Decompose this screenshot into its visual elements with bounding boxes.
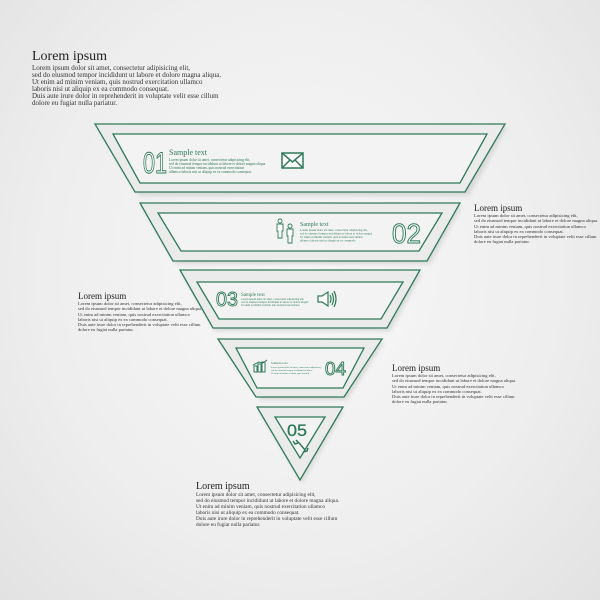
label 04: sed do eiusmod tempor incididunt ut labore	[271, 369, 313, 372]
label 03: 03	[216, 289, 238, 311]
text block: right 2: dolore eu fugiat nulla pariatur.	[392, 399, 448, 404]
label 01: sed do eiusmod tempor incididunt ut labore et dolore magna aliqua.	[169, 162, 266, 166]
label 03: Ut enim ad minim veniam, quis nostrud exercitation	[241, 304, 300, 307]
label 04	[271, 359, 346, 379]
label 04: Ut enim ad minim veniam, quis nostrud	[271, 372, 310, 375]
label 01: Ut enim ad minim veniam, quis nostrud exercitation	[169, 166, 244, 171]
text block: top left: Lorem ipsum	[32, 49, 107, 64]
label 03	[216, 289, 309, 311]
text block: left: sed do eiusmod tempor incididunt ut labore et dolore magna aliqua.	[78, 306, 202, 311]
text block: top left: Duis aute irure dolor in reprehenderit in voluptate velit esse cillum	[32, 92, 219, 100]
text block: top left: dolore eu fugiat nulla pariatur.	[32, 99, 117, 107]
text block: top left: sed do eiusmod tempor incididunt ut labore et dolore magna aliqua.	[32, 71, 221, 79]
text block: top left: Ut enim ad minim veniam, quis nostrud exercitation ullamco	[32, 78, 202, 86]
text block: right 2: Ut enim ad minim veniam, quis nostrud exercitation ullamco	[392, 384, 504, 389]
label 04: Sample text	[271, 361, 288, 365]
segment 1	[95, 124, 507, 196]
text block: bottom: dolore eu fugiat nulla pariatur.	[196, 522, 260, 528]
label 04: Lorem ipsum dolor sit amet, consectetur adipisicing	[271, 366, 322, 369]
text block: right 1: Lorem ipsum dolor sit amet, consectetur adipisicing elit,	[474, 213, 578, 218]
label 02: Ut enim ad minim veniam, quis nostrud exercitation	[300, 235, 363, 240]
text block: right 2: laboris nisi ut aliquip ex ea commodo consequat.	[392, 389, 482, 394]
label 04: 04	[325, 359, 346, 379]
icon: bar chart	[253, 360, 267, 372]
icon: wrench	[293, 440, 308, 452]
text block: bottom: Ut enim ad minim veniam, quis nostrud exercitation ullamco	[196, 504, 325, 510]
text block: bottom: sed do eiusmod tempor incididunt ut labore et dolore magna aliqua.	[196, 498, 339, 504]
text block: right 1: Lorem ipsum	[474, 203, 522, 213]
segment 4	[218, 339, 384, 400]
segment 5	[257, 407, 344, 483]
text block: bottom	[196, 481, 339, 528]
label 02: Sample text	[300, 222, 329, 228]
label 02: sed do eiusmod tempor incididunt ut labore et dolore magna	[300, 232, 373, 236]
text block: right 2: Duis aute irure dolor in reprehenderit in voluptate velit esse cillum	[392, 394, 514, 399]
text block: right 1: Ut enim ad minim veniam, quis nostrud exercitation ullamco	[474, 224, 586, 229]
text block: left: laboris nisi ut aliquip ex ea commodo consequat.	[78, 317, 168, 322]
label 03: Sample text	[241, 293, 265, 298]
label 02: 02	[392, 218, 421, 249]
text block: top left: Lorem ipsum dolor sit amet, consectetur adipisicing elit,	[32, 64, 190, 72]
label 01: 01	[143, 147, 167, 180]
label 02: Lorem ipsum dolor sit amet, consectetur adipisicing elit,	[300, 228, 368, 233]
text block: left: Ut enim ad minim veniam, quis nostrud exercitation ullamco	[78, 312, 190, 317]
segment 2	[140, 203, 462, 264]
text block: bottom: Lorem ipsum	[196, 481, 250, 492]
text block: left: Lorem ipsum dolor sit amet, consectetur adipisicing elit,	[78, 301, 182, 306]
icon: speaker	[318, 291, 336, 307]
text block: right 2: Lorem ipsum dolor sit amet, consectetur adipisicing elit,	[392, 373, 496, 378]
text block: left: dolore eu fugiat nulla pariatur.	[78, 327, 134, 332]
text block: right 2: sed do eiusmod tempor incididunt ut labore et dolore magna aliqua.	[392, 378, 516, 383]
text block: left	[78, 291, 202, 332]
label 03: sed do eiusmod tempor incididunt ut labore et dolore magna	[241, 301, 309, 304]
text block: right 1: sed do eiusmod tempor incididunt ut labore et dolore magna aliqua.	[474, 218, 598, 223]
text block: left: Lorem ipsum	[78, 291, 126, 301]
text block: bottom: laboris nisi ut aliquip ex ea commodo consequat.	[196, 510, 300, 516]
text block: right 2: Lorem ipsum	[392, 363, 440, 373]
label 03: Lorem ipsum dolor sit amet, consectetur adipisicing elit,	[241, 298, 304, 301]
icon: envelope	[282, 153, 303, 168]
label 05: 05	[287, 421, 307, 440]
text block: right 1: laboris nisi ut aliquip ex ea commodo consequat.	[474, 229, 564, 234]
text block: right 2	[392, 363, 516, 404]
label 01	[143, 147, 266, 180]
text block: bottom: Duis aute irure dolor in reprehenderit in voluptate velit esse cillum	[196, 516, 337, 522]
text block: right 1	[474, 203, 598, 244]
text block: left: Duis aute irure dolor in reprehenderit in voluptate velit esse cillum	[78, 322, 200, 327]
text block: right 1: dolore eu fugiat nulla pariatur.	[474, 239, 530, 244]
text block: top left: laboris nisi ut aliquip ex ea commodo consequat.	[32, 85, 169, 93]
text block: right 1: Duis aute irure dolor in reprehenderit in voluptate velit esse cillum	[474, 234, 596, 239]
text block: top left	[32, 49, 221, 107]
label 01: ullamco laboris nisi ut aliquip ex ea commodo consequat.	[169, 170, 252, 174]
label 02	[300, 218, 421, 249]
text block: bottom: Lorem ipsum dolor sit amet, consectetur adipisicing elit,	[196, 492, 316, 498]
label 01: Lorem ipsum dolor sit amet, consectetur adipisicing elit,	[169, 158, 250, 163]
label 02: ullamco laboris nisi ut aliquip ex ea commodo	[300, 238, 356, 242]
segment 3	[180, 270, 422, 331]
icon: people	[277, 219, 293, 243]
label 01: Sample text	[169, 148, 208, 157]
